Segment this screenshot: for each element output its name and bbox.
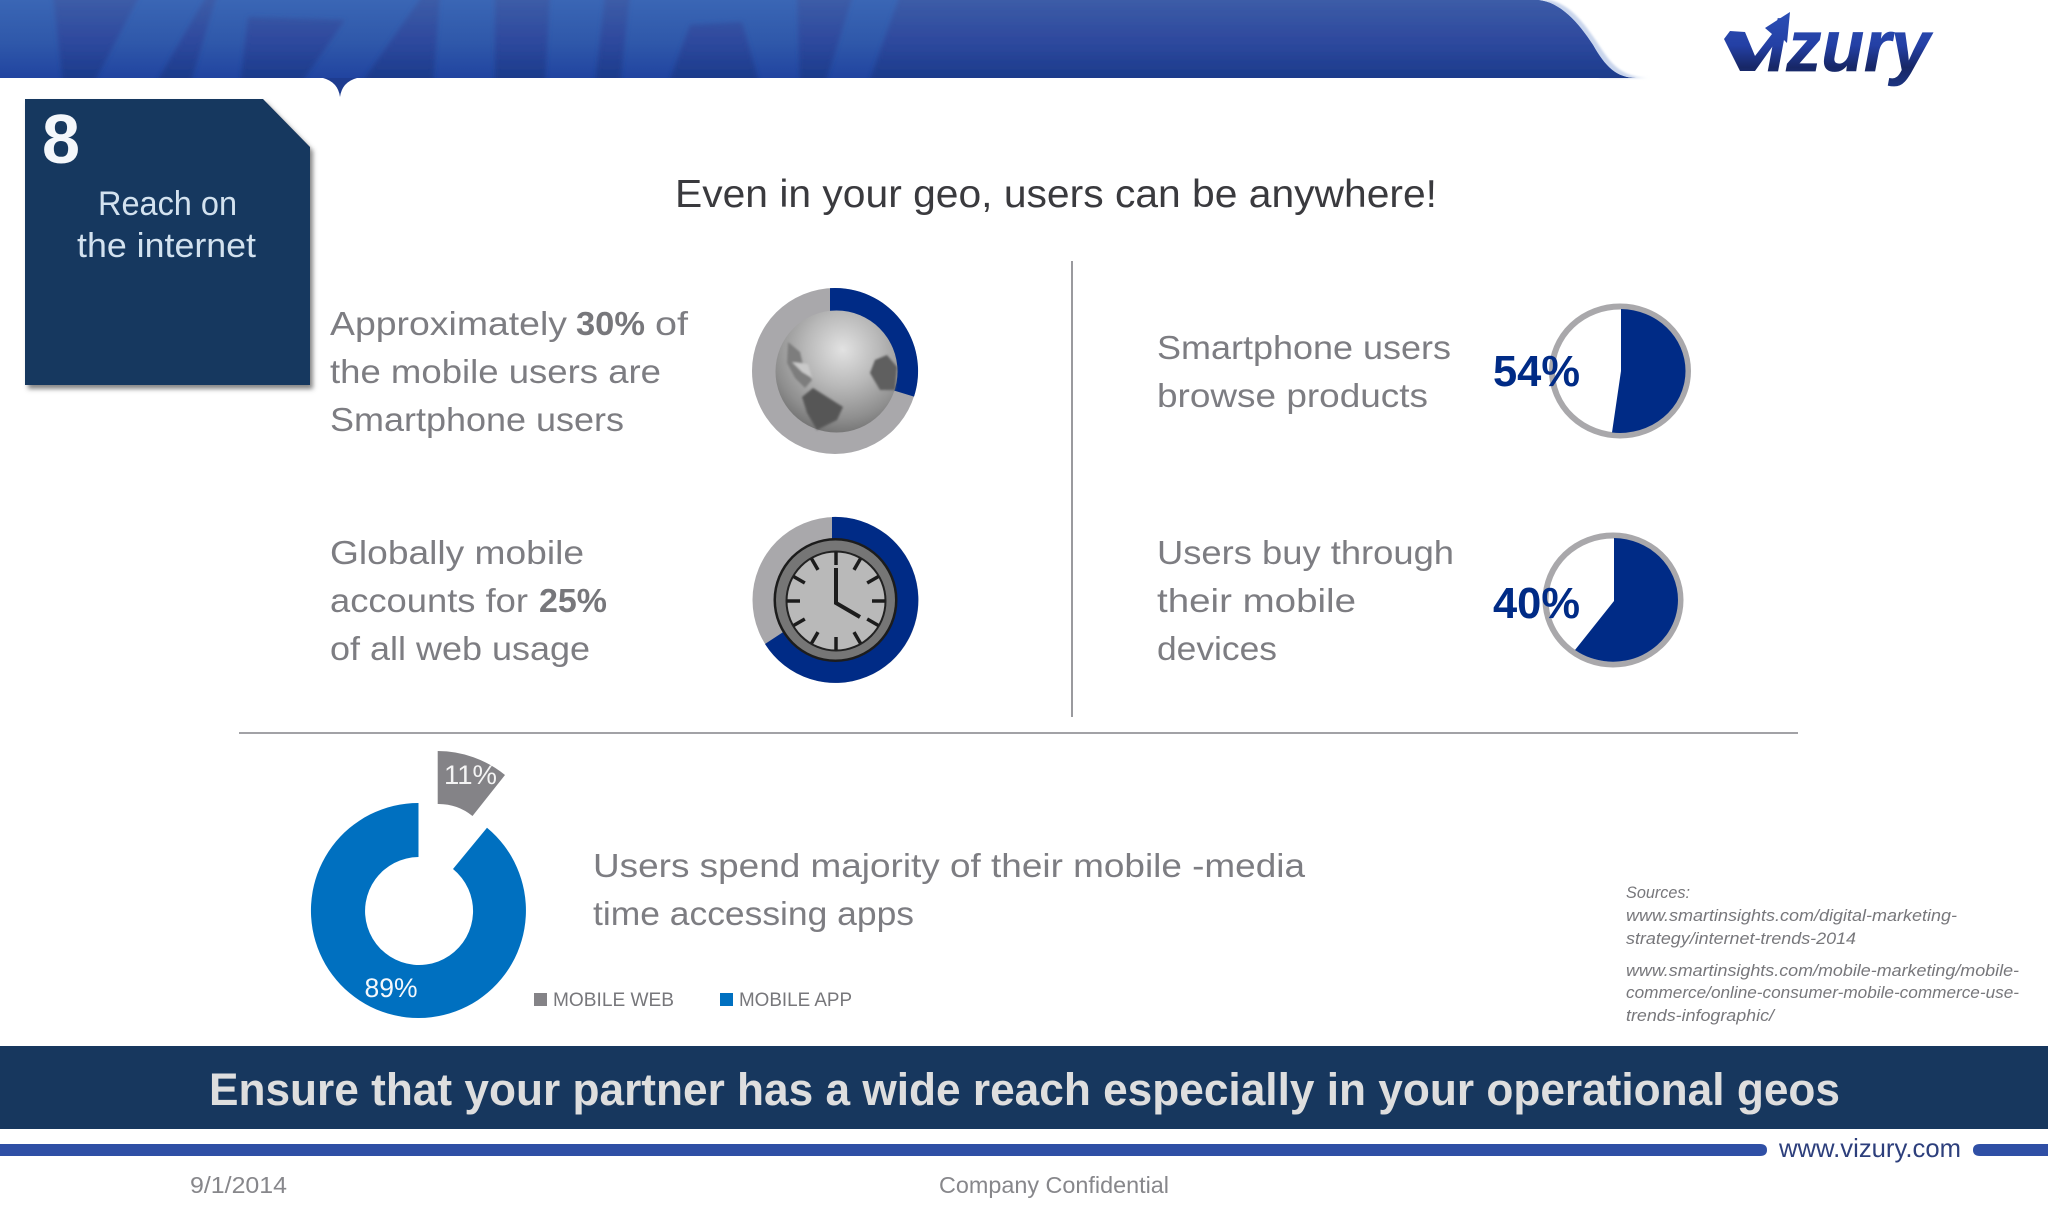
text block: 25% web usage: Globally mobile [330,534,584,571]
text block: buy through mobile: devices [1157,630,1277,667]
text block: apps: Users spend majority of their mobile -media [593,847,1306,884]
section name: Reach on [98,185,237,223]
title: Even in your geo, users can be anywhere! [675,173,1437,216]
text block: apps: time accessing apps [593,895,914,932]
legend: MOBILE APP [739,990,852,1011]
chart: globe donut 30% [752,288,918,454]
section name: the internet [77,227,257,265]
text block: 30% smartphone users: Approximately [330,305,568,342]
text block: 25% web usage: 25% [539,582,607,619]
chart: clock donut 25% [752,517,918,683]
text block: 25% web usage: of all web usage [330,630,590,667]
text block: browse products: browse products [1157,377,1428,414]
legend: MOBILE WEB [553,990,674,1011]
text block: buy through mobile: their mobile [1157,582,1356,619]
slice: mobile web 11% [438,751,505,816]
text block: 30% smartphone users: 30% [576,305,645,342]
text block: browse products: Smartphone users [1157,329,1451,366]
sources: commerce/online-consumer-mobile-commerce-use- [1626,983,2019,1002]
takeaway banner: Ensure that your partner has a wide reach especially in your operational geos [209,1064,1840,1115]
sources [1626,883,2019,1025]
text block: browse products [1157,329,1451,414]
value: 54%: 54% [1493,347,1580,396]
pointer notch [323,78,357,97]
text block: 25% web usage [330,534,607,667]
slice: mobile app 89% [311,803,526,1018]
icon: globe [776,310,898,432]
chart: app vs web donut [311,751,526,1018]
chart: pie 40% [1493,536,1680,664]
text block: 30% smartphone users: of [655,305,689,342]
footer confidentiality note: Company Confidential [939,1172,1169,1198]
section number: 8 [42,100,80,178]
horizontal divider [239,732,1798,734]
chart: pie 54% [1493,306,1688,436]
section tab: 8 Reach on the internet [25,99,310,385]
header banner [0,0,1650,97]
logo: Vizury: izury [1767,7,1934,87]
section name [77,185,257,265]
takeaway banner [0,1046,2048,1129]
text block: apps [593,847,1306,932]
sources: www.smartinsights.com/mobile-marketing/mobile- [1626,961,2019,980]
icon: clock [774,538,898,662]
footer date: 9/1/2014 [190,1172,287,1198]
sources: strategy/internet-trends-2014 [1626,929,1856,948]
footer rule with URL [0,1133,2048,1163]
text block: 25% web usage: accounts for [330,582,528,619]
footer rule with URL: www.vizury.com [1778,1133,1961,1163]
text block: 30% smartphone users [330,305,689,438]
text block: buy through mobile [1157,534,1454,667]
label: 11%: 11% [444,760,497,790]
text block: 30% smartphone users: the mobile users are [330,353,661,390]
legend [534,990,852,1011]
sources: www.smartinsights.com/digital-marketing- [1626,906,1957,925]
sources: trends-infographic/ [1626,1006,1776,1025]
text block: buy through mobile: Users buy through [1157,534,1454,571]
label: 89%: 89% [364,973,418,1003]
text block: 30% smartphone users: Smartphone users [330,401,624,438]
value: 40%: 40% [1493,579,1580,628]
vertical divider [1071,261,1073,717]
sources: Sources: [1626,883,1690,902]
